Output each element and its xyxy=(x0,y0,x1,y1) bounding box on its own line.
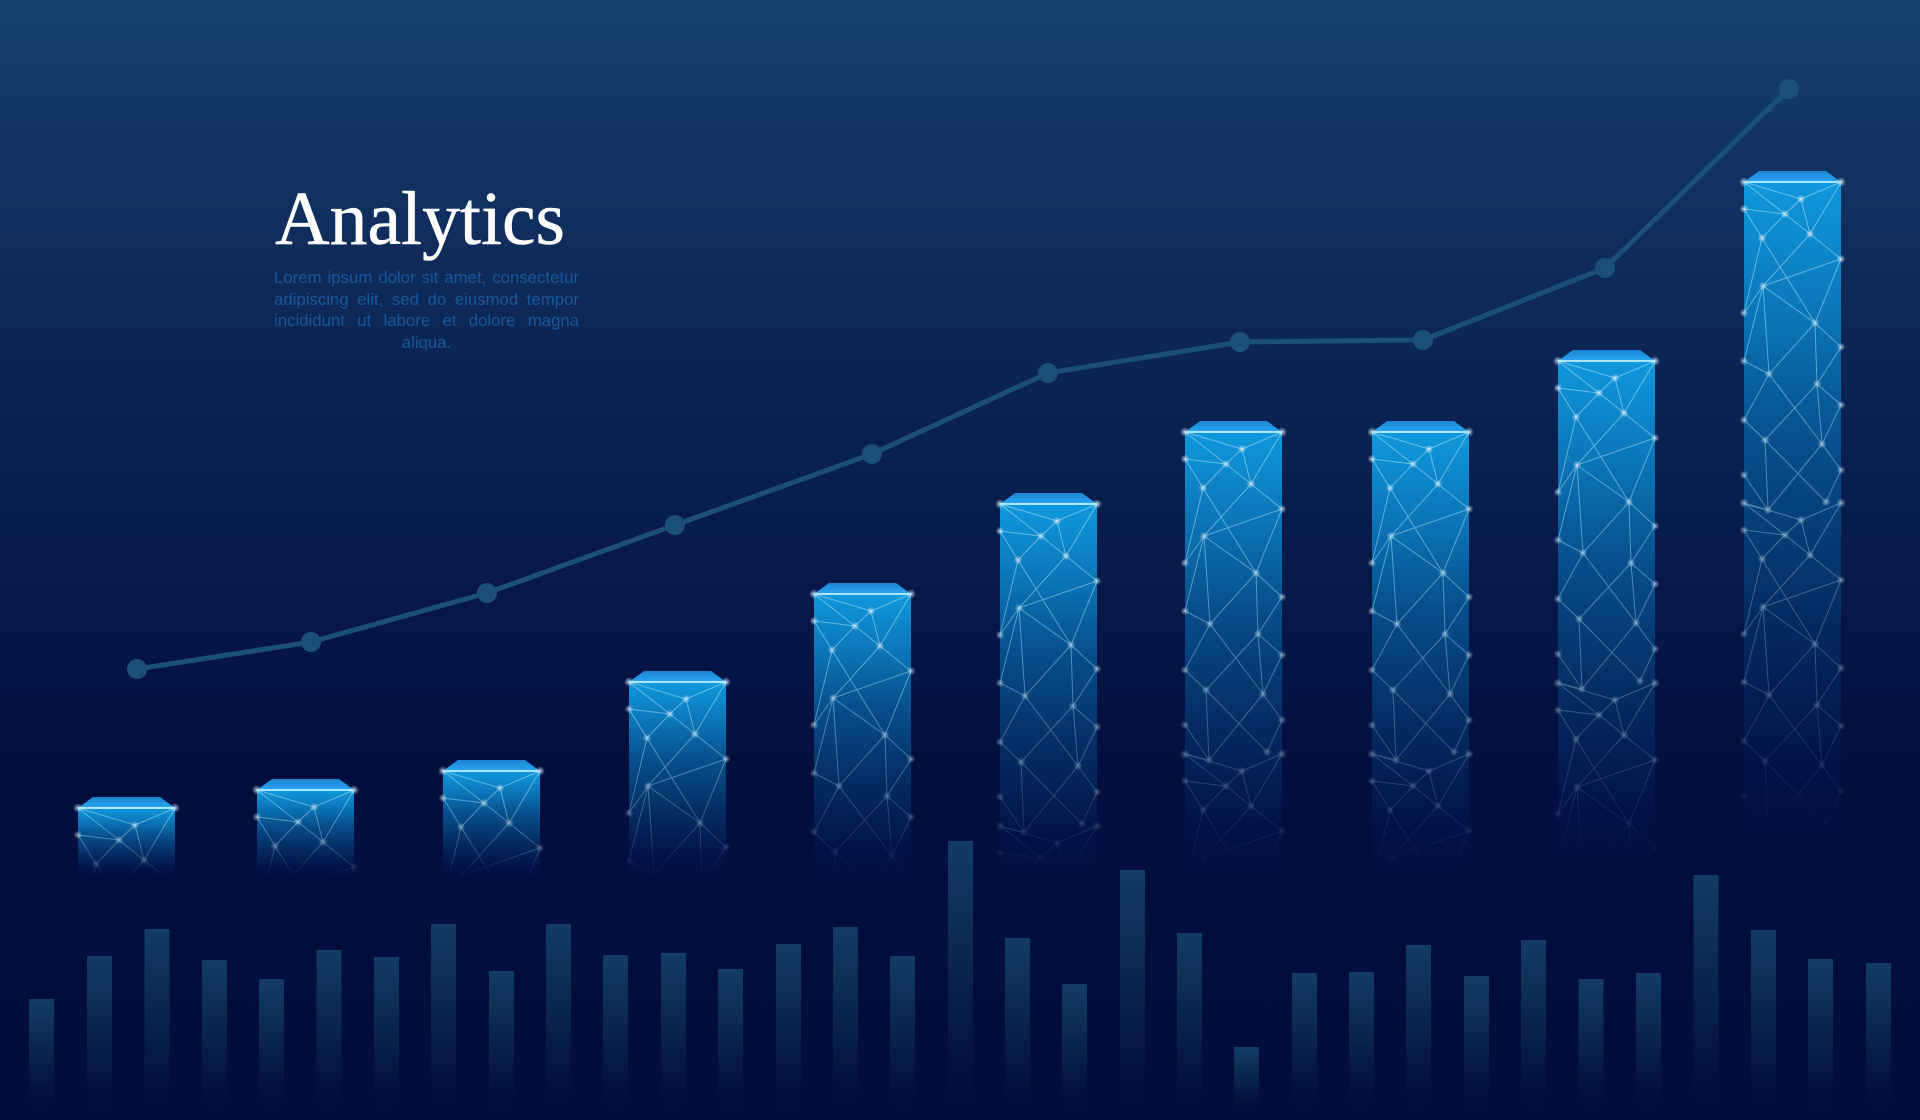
title: Analytics xyxy=(275,177,565,261)
bar 1 xyxy=(74,797,180,875)
description text xyxy=(274,268,579,352)
background bar chart xyxy=(29,841,1891,1110)
bar 9 xyxy=(1553,350,1660,890)
description text: Lorem ipsum dolor sit amet, consectetur xyxy=(274,268,579,287)
bar 3 xyxy=(438,760,544,874)
trend line with markers xyxy=(127,79,1799,679)
bar 10 xyxy=(1739,171,1846,836)
bar 5 xyxy=(810,583,916,868)
bar 7 xyxy=(1180,421,1286,860)
description text: incididunt ut labore et dolore magna xyxy=(274,311,579,330)
bar 6 xyxy=(996,493,1102,864)
bar 4 xyxy=(624,671,730,872)
description text: aliqua. xyxy=(402,332,451,352)
bar 8 xyxy=(1368,421,1474,860)
bar 2 xyxy=(252,779,358,874)
description text: adipiscing elit, sed do eiusmod tempor xyxy=(274,290,579,308)
